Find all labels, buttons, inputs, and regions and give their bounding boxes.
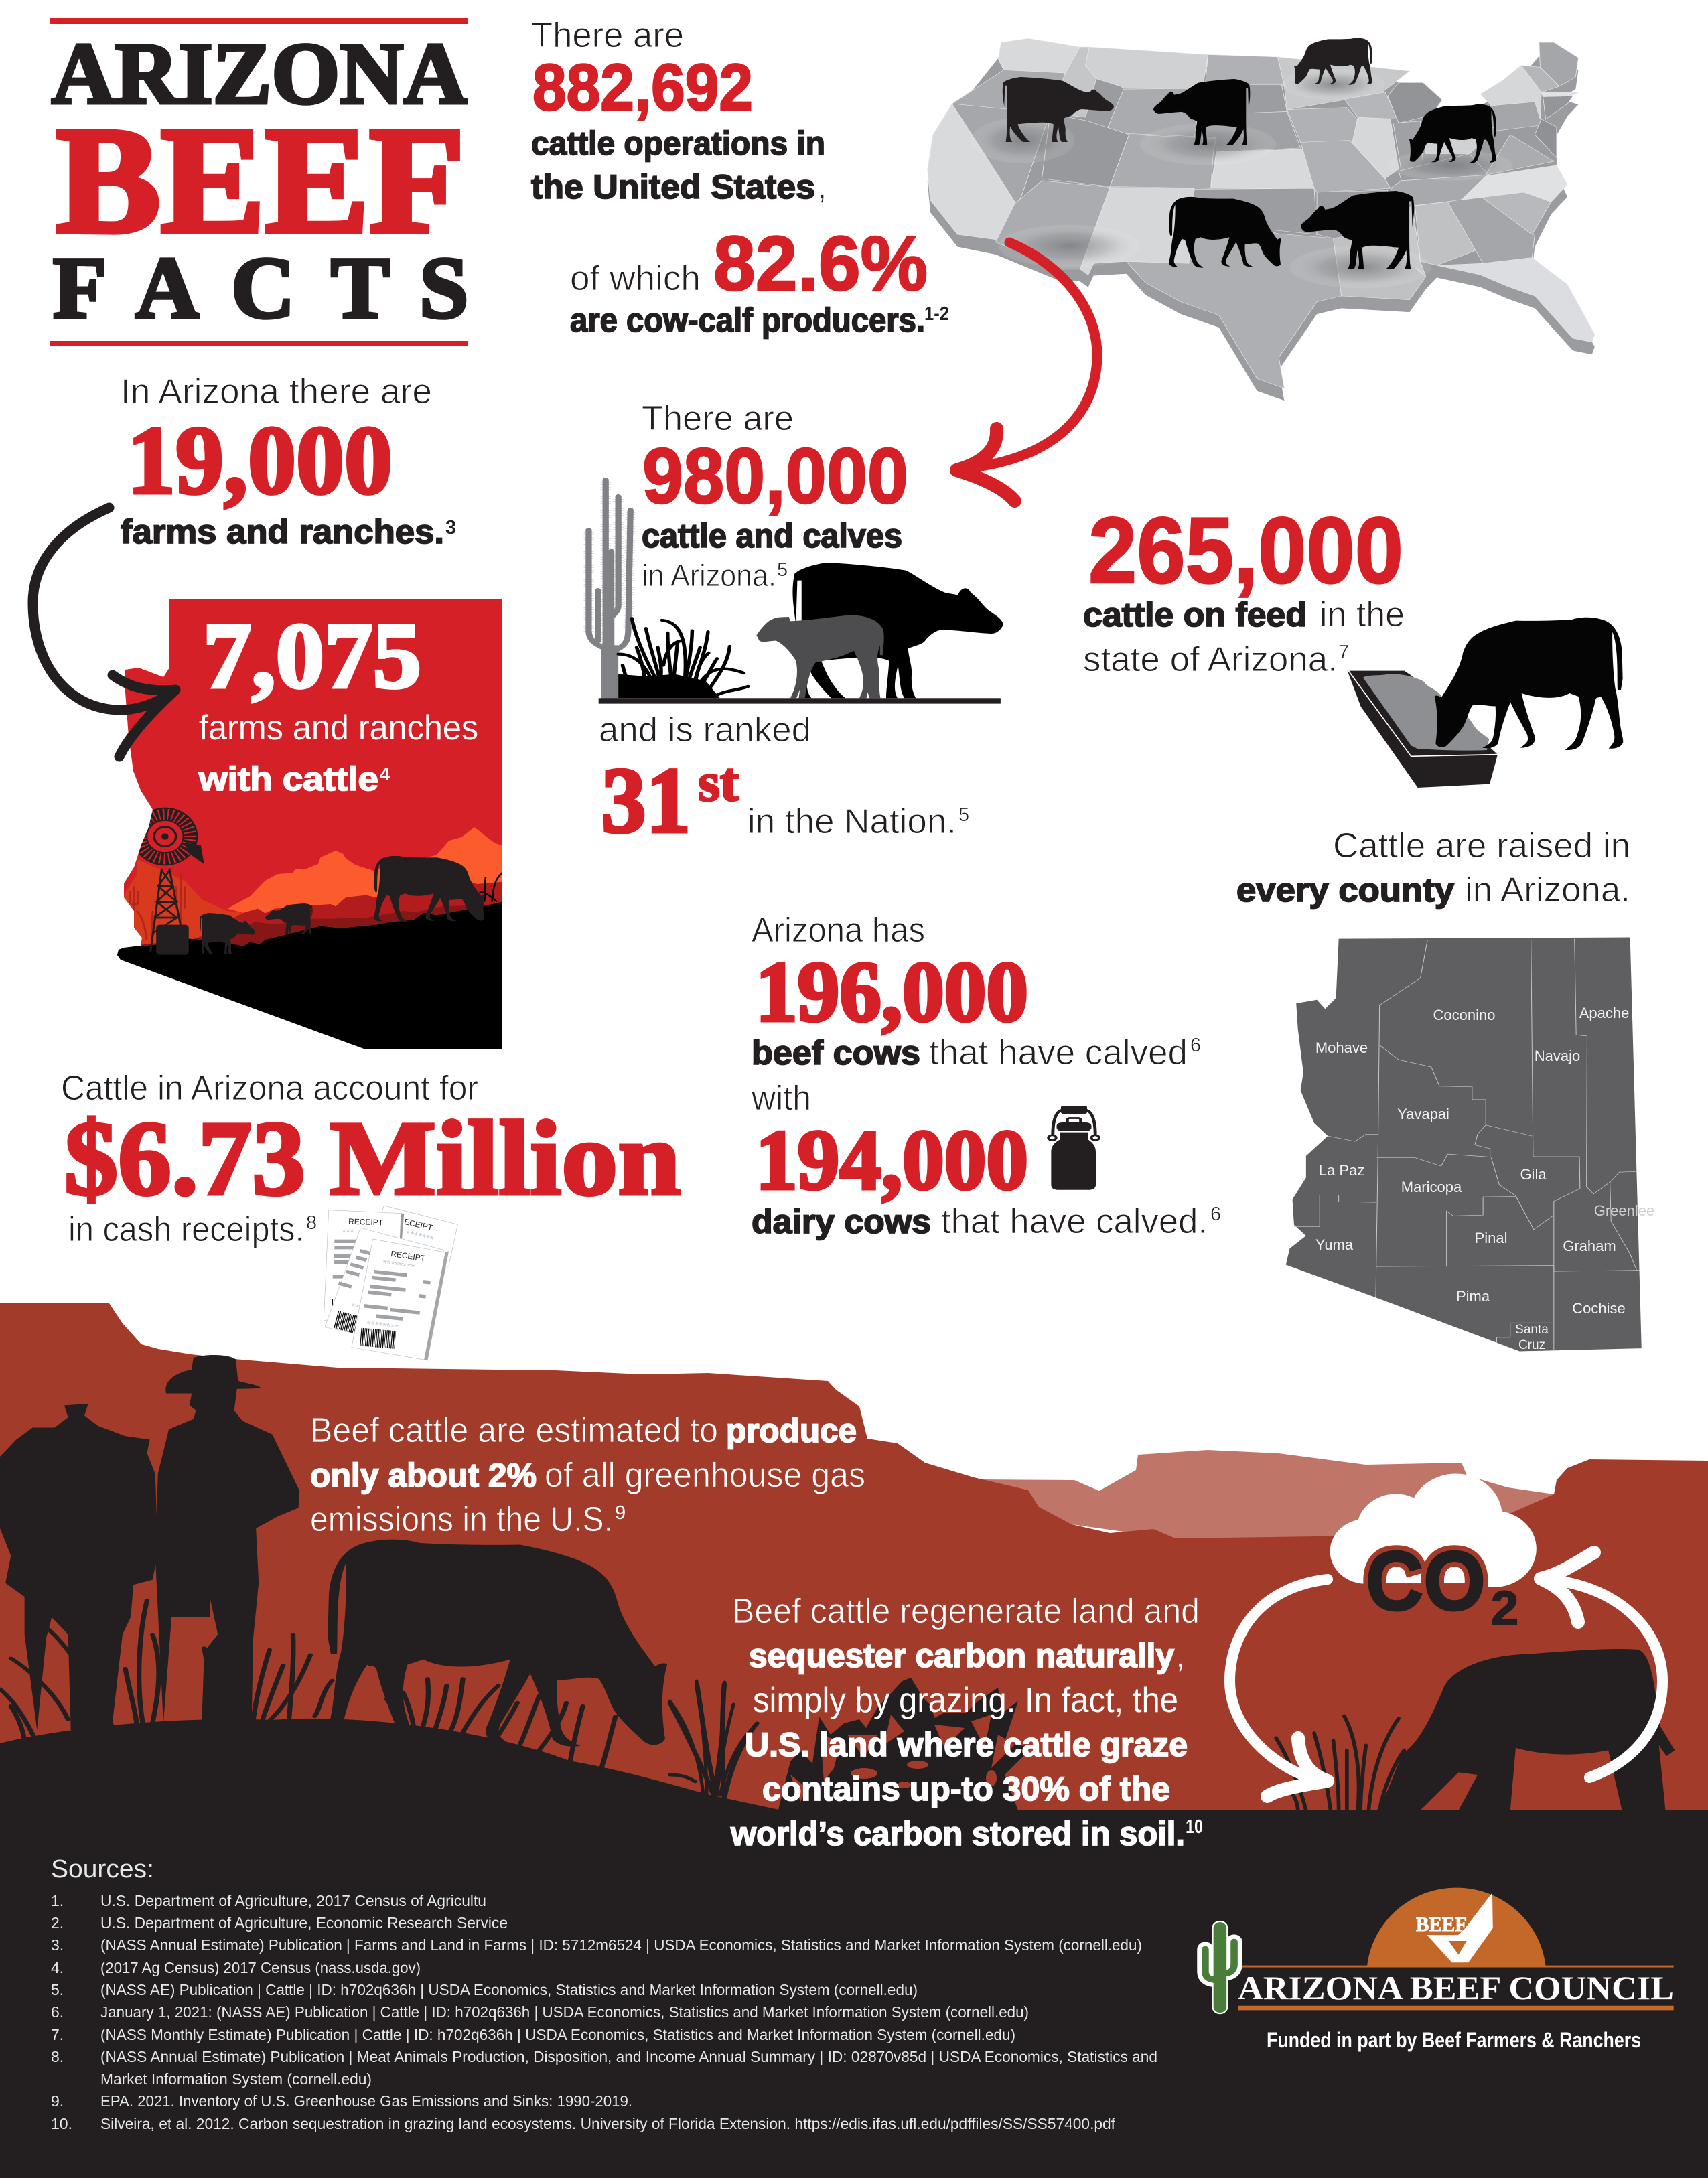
cow behind arrows <box>1377 1649 1675 1810</box>
source items: Market Information System (cornell.edu) <box>100 2070 372 2088</box>
heading: every county: Cattle are raised in <box>1333 826 1630 865</box>
text: carbon sequestration: world’s carbon stored in soil. <box>730 1815 1185 1853</box>
sources list <box>51 1855 1157 2132</box>
county labels: Cruz <box>1518 1338 1545 1352</box>
stat: Arizona farms and ranches: In Arizona there are <box>121 372 432 411</box>
text: greenhouse gas <box>310 1411 865 1539</box>
text: carbon sequestration <box>730 1592 1203 1853</box>
county labels: Pinal <box>1475 1230 1507 1246</box>
stat: cattle on feed: state of Arizona. <box>1083 640 1338 679</box>
stat: Arizona farms and ranches: 3 <box>445 517 456 538</box>
illustration: CO2 cycle with cow <box>1230 1473 1675 1810</box>
county labels: Graham <box>1563 1238 1616 1254</box>
icon: receipts: RECEIPT <box>390 1249 427 1263</box>
text: carbon sequestration: Beef cattle regenerate land and <box>732 1592 1200 1631</box>
source items: 4. <box>51 1959 64 1976</box>
stat: beef and dairy cows: beef cows <box>752 1034 920 1072</box>
stat: beef and dairy cows: with <box>751 1079 811 1118</box>
stat: ranked 31st: 31 <box>601 749 691 853</box>
logo: Arizona Beef Council: BEEF <box>1416 1913 1467 1936</box>
source items: 9. <box>51 2092 64 2110</box>
title: FACTS <box>53 238 468 337</box>
source items: 3. <box>51 1936 64 1954</box>
silhouette: shrub and grass <box>670 1678 1031 1815</box>
stat: cash receipts: $6.73 <box>64 1100 305 1218</box>
stat: beef and dairy cows: Arizona has <box>752 911 925 950</box>
stat: beef and dairy cows: 194,000 <box>756 1112 1028 1208</box>
CO2 label: CO <box>1366 1535 1486 1628</box>
illustration: cow eating at feed trough <box>1348 618 1623 788</box>
source items: (NASS Annual Estimate) Publication | Meat Animals Production, Disposition, and Income Annual Summary | ID: 02870v85d | USDA Economics, Statistics and <box>100 2048 1157 2065</box>
text: carbon sequestration: 10 <box>1186 1816 1203 1838</box>
title: ARIZONA <box>52 24 467 123</box>
map: Arizona counties <box>1286 937 1654 1352</box>
stat: beef and dairy cows <box>751 911 1221 1241</box>
logo: Arizona Beef Council: ARIZONA BEEF COUNCIL <box>1238 1969 1674 2007</box>
title: BEEF <box>56 96 465 265</box>
icon: green cactus <box>1205 1928 1234 2007</box>
stat: Arizona farms and ranches: 19,000 <box>127 406 393 514</box>
source items: U.S. Department of Agriculture, 2017 Census of Agricultu <box>100 1892 486 1909</box>
stat: cattle on feed: cattle on feed <box>1083 596 1307 634</box>
panel: Arizona state with ranch scene <box>114 599 502 1087</box>
stat: beef and dairy cows: dairy cows <box>752 1203 931 1240</box>
text: greenhouse gas: emissions in the U.S. <box>310 1500 613 1539</box>
text: 7,075 farms with cattle: 4 <box>380 764 390 784</box>
source items <box>51 1892 1157 2132</box>
text: carbon sequestration: simply by grazing. In fact, the <box>753 1681 1178 1720</box>
stat: cattle operations in US <box>531 16 827 206</box>
white arrows <box>1230 1552 1662 1796</box>
stat: beef and dairy cows: 6 <box>1190 1035 1201 1056</box>
stat: beef and dairy cows: that have calved <box>929 1033 1188 1072</box>
stat: cow-calf producers <box>570 221 949 339</box>
heading: every county <box>1236 826 1630 910</box>
logo: Arizona Beef Council <box>1205 1888 1674 2052</box>
stat: cash receipts: 8 <box>306 1212 317 1234</box>
text: carbon sequestration: U.S. land where cattle graze <box>745 1726 1188 1763</box>
county labels: Yavapai <box>1397 1106 1449 1122</box>
stat: cattle operations in US: There are <box>531 16 684 55</box>
source items: (2017 Ag Census) 2017 Census (nass.usda.gov) <box>100 1959 421 1976</box>
stat: cattle operations in US: the United States <box>531 168 815 206</box>
text: carbon sequestration: contains up-to 30% of the <box>762 1770 1170 1808</box>
source items: U.S. Department of Agriculture, Economic Research Service <box>100 1914 508 1932</box>
stat: cattle and calves in Arizona: in Arizona. <box>642 558 776 593</box>
source items: 2. <box>51 1914 64 1932</box>
source items: EPA. 2021. Inventory of U.S. Greenhouse Gas Emissions and Sinks: 1990-2019. <box>100 2092 632 2110</box>
text: 7,075 farms with cattle: farms and ranches <box>199 709 478 747</box>
county labels: Navajo <box>1535 1047 1580 1064</box>
sources list: Sources: <box>51 1855 154 1883</box>
stat: cattle and calves in Arizona: 5 <box>777 559 788 581</box>
stat: cattle on feed: 265,000 <box>1088 498 1403 603</box>
stat: cow-calf producers: 1-2 <box>924 303 949 325</box>
text: 7,075 farms with cattle <box>198 604 478 798</box>
stat: cash receipts <box>61 1069 681 1249</box>
stat: cattle and calves in Arizona: There are <box>642 399 794 438</box>
county labels: Mohave <box>1315 1039 1368 1056</box>
title <box>50 18 468 346</box>
stat: cattle on feed: 7 <box>1338 642 1349 663</box>
stat: Arizona farms and ranches <box>121 372 456 551</box>
source items: 6. <box>51 2003 64 2021</box>
text: 7,075 farms with cattle: 7,075 <box>203 604 421 708</box>
CO2 label: CO <box>1366 1535 1486 1628</box>
stat: cattle on feed <box>1083 498 1405 679</box>
source items: Silveira, et al. 2012. Carbon sequestration in grazing land ecosystems. University of Florida Extension. https://edis.ifas.ufl.edu/pdffiles/SS/SS57400.pdf <box>100 2115 1116 2132</box>
icon: receipts: *** <box>342 1227 354 1238</box>
stat: cattle on feed: in the <box>1320 595 1405 634</box>
stat: ranked 31st <box>599 711 969 853</box>
text: 7,075 farms with cattle: with cattle <box>198 760 378 798</box>
county labels: La Paz <box>1319 1162 1364 1179</box>
county labels: Apache <box>1579 1005 1629 1021</box>
icon: receipts: ******** <box>382 1258 415 1274</box>
county labels: Coconino <box>1433 1007 1495 1023</box>
source items: January 1, 2021: (NASS AE) Publication | Cattle | ID: h702q636h | USDA Economics, Statistics and Market Information System (cornell.edu) <box>100 2003 1029 2021</box>
stat: cow-calf producers: 82.6% <box>713 221 928 307</box>
text: greenhouse gas: produce <box>726 1412 857 1449</box>
stat: cow-calf producers: are cow-calf producers. <box>570 301 925 339</box>
arrow: black curve into Arizona panel <box>33 508 175 757</box>
county labels: Yuma <box>1315 1236 1354 1253</box>
stat: cattle operations in US: , <box>817 167 827 206</box>
stat: Arizona farms and ranches: farms and ranches. <box>121 513 444 551</box>
source items: 7. <box>51 2026 64 2043</box>
logo: Arizona Beef Council: Funded in part by Beef Farmers & Ranchers <box>1267 2028 1641 2052</box>
county labels: Pima <box>1456 1288 1490 1305</box>
heading: every county: every county <box>1236 871 1454 909</box>
stat: cattle and calves in Arizona: 980,000 <box>642 432 908 520</box>
text: greenhouse gas: Beef cattle are estimated to <box>310 1411 718 1450</box>
county labels: Cochise <box>1572 1300 1626 1317</box>
stat: cow-calf producers: of which <box>570 259 701 298</box>
stat: cattle operations in US: 882,692 <box>532 50 753 124</box>
stat: beef and dairy cows: 196,000 <box>756 944 1028 1039</box>
county labels: Greenlee <box>1594 1202 1654 1219</box>
icon: receipts: ** <box>350 1301 360 1314</box>
stat: beef and dairy cows: that have calved. <box>941 1202 1208 1241</box>
arrow: US map to Arizona cattle <box>956 242 1097 501</box>
scene: windmill, hills and cattle <box>117 808 502 1049</box>
source items: (NASS AE) Publication | Cattle | ID: h702q636h | USDA Economics, Statistics and Market Information System (cornell.edu) <box>100 1981 918 1999</box>
stat: cattle and calves in Arizona: cattle and calves <box>642 517 902 555</box>
CO2 label: 2 <box>1491 1582 1518 1636</box>
source items: 1. <box>51 1892 64 1909</box>
source items: 10. <box>51 2115 72 2132</box>
text: carbon sequestration: , <box>1176 1636 1185 1675</box>
cloud <box>1330 1473 1537 1587</box>
icon: receipts: ******* <box>405 1228 435 1246</box>
stat: cash receipts: Million <box>330 1100 681 1218</box>
silhouette: cowboy and horse <box>0 1355 757 1798</box>
illustration: cactus, grass, cow and calf <box>589 480 1003 704</box>
stat: cattle operations in US: cattle operations in <box>531 125 825 162</box>
text: greenhouse gas: of all greenhouse gas <box>545 1456 865 1495</box>
heading: every county: in Arizona. <box>1465 871 1630 910</box>
stat: cash receipts: Cattle in Arizona account for <box>61 1069 478 1108</box>
stat: ranked 31st: 5 <box>958 804 969 826</box>
stat: ranked 31st: st <box>698 751 739 812</box>
US map with cattle <box>928 38 1595 401</box>
silhouette: grazing cow <box>327 1540 667 1749</box>
county labels: Santa <box>1515 1323 1549 1337</box>
text: greenhouse gas: only about 2% <box>310 1457 537 1494</box>
icon: receipts <box>324 1206 457 1361</box>
icon: receipts: ******** <box>366 1319 399 1334</box>
county labels: Gila <box>1520 1166 1547 1183</box>
stat: cash receipts: in cash receipts. <box>68 1210 304 1249</box>
stat: cattle and calves in Arizona <box>642 399 908 593</box>
stat: ranked 31st: and is ranked <box>599 711 811 749</box>
stat: ranked 31st: in the Nation. <box>748 802 956 841</box>
stat: beef and dairy cows: 6 <box>1210 1204 1221 1225</box>
text: carbon sequestration: sequester carbon naturally <box>749 1637 1174 1674</box>
source items: (NASS Monthly Estimate) Publication | Cattle | ID: h702q636h | USDA Economics, Statistics and Market Information System (cornell.edu) <box>100 2026 1015 2043</box>
county labels <box>1315 1005 1654 1352</box>
source items: 8. <box>51 2048 64 2065</box>
county labels: Maricopa <box>1401 1179 1462 1195</box>
logo sun and check <box>1238 1888 1674 2010</box>
grass near cow <box>1276 1716 1404 1810</box>
text: greenhouse gas: 9 <box>615 1502 626 1524</box>
source items: 5. <box>51 1981 64 1999</box>
source items: (NASS Annual Estimate) Publication | Farms and Land in Farms | ID: 5712m6524 | USDA Economics, Statistics and Market Information System (cornell.edu) <box>100 1936 1142 1954</box>
icon: receipts: RECEIPT <box>348 1217 384 1227</box>
icon: milk can <box>1048 1106 1099 1190</box>
landscape: red mesas and dark ground <box>0 1303 1708 2178</box>
icon: receipts: ECEIPT <box>403 1217 434 1232</box>
